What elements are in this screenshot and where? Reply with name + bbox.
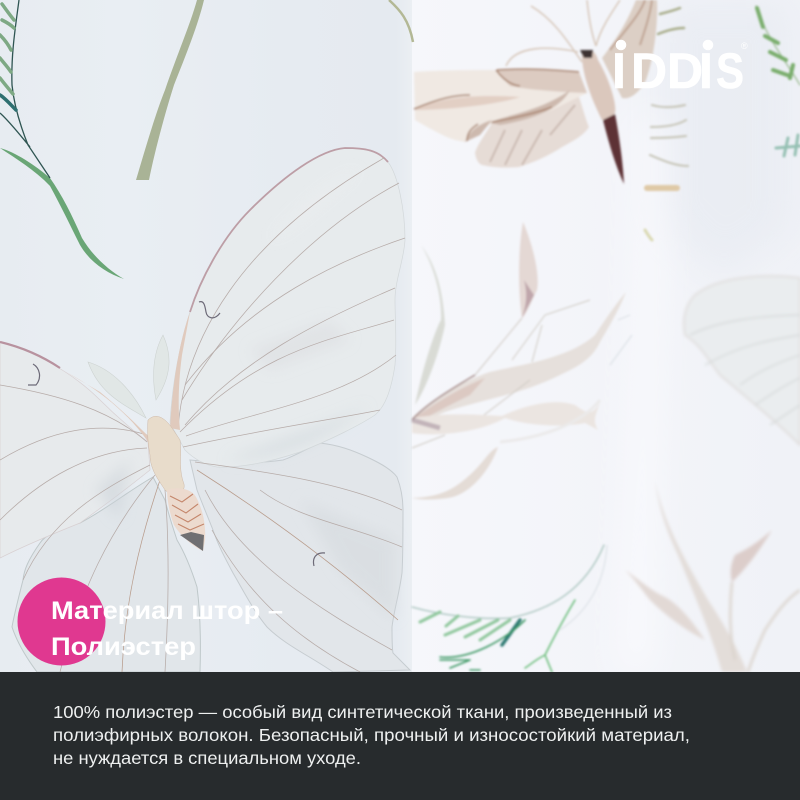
heading <box>51 597 283 661</box>
logo: IDDIS: IDDI <box>612 43 713 99</box>
butterfly upper right wing <box>170 148 405 467</box>
green fern bottom centre <box>412 545 604 672</box>
butterfly antennae leaves <box>88 335 169 418</box>
butterfly blurred right <box>684 276 800 445</box>
plant thin stems <box>412 300 590 448</box>
butterfly abdomen <box>167 488 205 551</box>
blurred stalk <box>655 480 747 672</box>
dark description band <box>0 672 800 800</box>
plant blurred bottom right <box>625 480 800 672</box>
pink accent circle <box>18 578 106 666</box>
butterfly lower left wing <box>12 477 200 672</box>
moth fore wing <box>414 69 587 142</box>
blurred leaf left <box>625 570 705 640</box>
plant branch centre <box>412 222 632 630</box>
moth body <box>582 51 615 120</box>
heading: Полиэстер <box>51 633 196 661</box>
moth top right <box>414 0 657 184</box>
heading: Материал штор – <box>51 597 283 625</box>
butterfly wing edge <box>190 148 388 312</box>
plant long leaf <box>412 292 626 432</box>
plant lower shoot <box>412 447 498 500</box>
plant upper leaf <box>415 245 445 405</box>
moth upper wing <box>602 0 657 98</box>
grass stem top centre <box>136 0 413 180</box>
butterfly upper left wing <box>0 342 150 558</box>
logo: IDDIS: S <box>716 43 744 99</box>
description text <box>53 702 690 768</box>
description text: 100% полиэстер — особый вид синтетической ткани, произведенный из <box>53 702 672 722</box>
moth antennae <box>506 0 620 66</box>
plant low leaf <box>412 402 600 434</box>
blurred bud <box>731 530 772 582</box>
fern top right corner <box>756 6 800 156</box>
moth tail <box>603 114 624 184</box>
logo: IDDIS: ® <box>741 41 748 51</box>
plant bud <box>519 222 538 318</box>
description text: полиэфирных волокон. Безопасный, прочный и износостойкий материал, <box>53 725 690 745</box>
butterfly veins <box>0 158 405 672</box>
blurred wing <box>684 276 800 445</box>
description text: не нуждается в специальном уходе. <box>53 748 361 768</box>
butterfly forewing struts <box>66 312 190 442</box>
moth hind wing <box>475 97 589 168</box>
curtain background <box>0 0 406 672</box>
butterfly eye marks <box>28 302 325 566</box>
butterfly lower right wing <box>190 443 410 672</box>
butterfly wing washes <box>100 432 318 505</box>
fern fronds centre right <box>645 8 688 240</box>
butterfly thorax <box>148 416 184 494</box>
fern and grass top left <box>0 0 124 279</box>
butterfly large <box>0 148 410 672</box>
